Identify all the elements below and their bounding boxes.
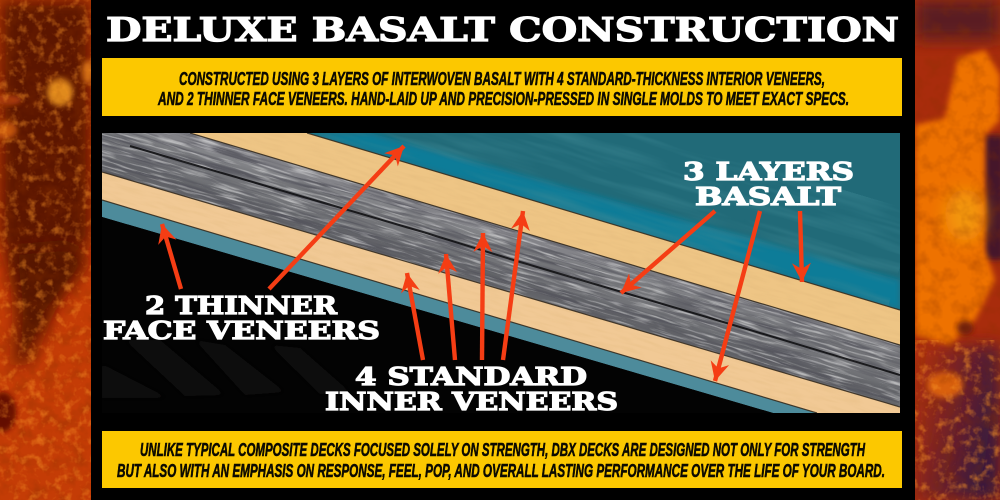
label: 2 thinner face veneers: 2 THINNER: [145, 291, 338, 320]
veneer edge lines: [102, 133, 900, 413]
panel: left lava texture: [0, 0, 94, 500]
arrows: basalt layers: [621, 211, 802, 381]
label: 3 layers basalt: [683, 157, 854, 211]
top teal face surface: [308, 133, 900, 310]
summary text: [117, 440, 885, 481]
bottom teal face edge: [102, 200, 817, 413]
arrows: face veneers: [162, 146, 404, 289]
label: 2 thinner face veneers: FACE VENEERS: [103, 316, 380, 345]
title: DELUXE BASALT CONSTRUCTION: [106, 10, 899, 49]
panel: top yellow intro banner: [102, 58, 902, 116]
arrows: inner veneers: [407, 211, 523, 360]
label: 3 layers basalt: 3 LAYERS: [683, 157, 854, 186]
top tan veneer: [191, 133, 900, 345]
label: 4 standard inner veneers: INNER VENEERS: [325, 387, 618, 416]
panel: deck cross-section photo: [102, 133, 900, 413]
intro text: [157, 69, 849, 109]
label: 4 standard inner veneers: [325, 362, 618, 416]
black lower area with faint shadows: [102, 217, 773, 413]
basalt layers: [102, 133, 900, 407]
panel: bottom yellow summary banner: [102, 431, 902, 488]
label: 3 layers basalt: BASALT: [695, 182, 841, 211]
label: 2 thinner face veneers: [103, 291, 380, 345]
panel: right lava texture: [915, 0, 1000, 500]
label: 4 standard inner veneers: 4 STANDARD: [355, 362, 587, 391]
bottom tan veneer: [102, 172, 900, 413]
